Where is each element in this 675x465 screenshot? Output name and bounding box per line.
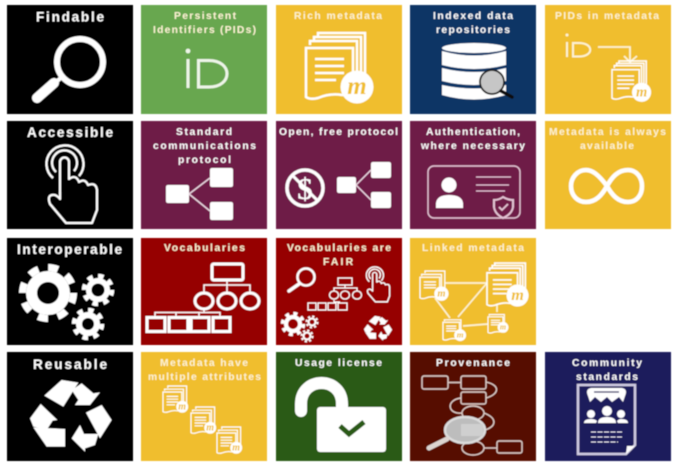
heading: Metadata is always available: Metadata is always: [549, 127, 666, 138]
heading: Authentication, where necessary: [420, 127, 525, 152]
icon: document A: m: [437, 289, 446, 300]
heading: Indexed data repositories: [433, 11, 513, 36]
icon: gears: [22, 268, 112, 338]
icon: small hierarchy: [308, 278, 362, 310]
heading: Vocabularies are FAIR: FAIR: [323, 257, 354, 268]
icon: no dollar sign: $: [297, 171, 313, 206]
panel: Findable: [7, 5, 133, 114]
icon: small touch hand: [366, 267, 390, 302]
panel: Rich metadata: [276, 5, 402, 114]
icon: metadata document stack: m: [347, 73, 367, 100]
heading: Community standards: [572, 358, 642, 383]
panel: Indexed data repositories: [410, 5, 536, 114]
heading: Standard communications protocol: protocol: [178, 155, 231, 166]
heading: Reusable: Reusable: [33, 357, 107, 372]
arrow: iD into document: [598, 47, 637, 62]
panel: Metadata is always available: [545, 121, 671, 229]
icon: document D: m: [500, 323, 506, 332]
heading: Accessible: Accessible: [27, 125, 113, 140]
heading: Metadata is always available: [549, 127, 666, 152]
panel: Community standards: [545, 352, 671, 461]
icon: document C: m: [457, 330, 464, 340]
heading: Persistent Identifiers (PIDs): Identifiers (PIDs): [153, 25, 256, 36]
icon: database with magnifier: [442, 43, 512, 100]
heading: Standard communications protocol: [153, 127, 256, 166]
icon: provenance flow diagram: [422, 376, 522, 455]
panel: Interoperable: [7, 238, 133, 345]
panel: Standard communications protocol: [141, 121, 267, 229]
icon: document two: m: [206, 423, 214, 434]
icon: standards document: [578, 385, 635, 454]
icon: network diagram: [166, 168, 233, 220]
heading: Linked metadata: Linked metadata: [422, 243, 524, 254]
connector lines: [435, 283, 497, 326]
heading: Usage license: Usage license: [295, 358, 382, 369]
heading: Vocabularies are FAIR: Vocabularies are: [287, 243, 391, 254]
heading: Metadata have multiple attributes: multiple attributes: [148, 372, 261, 383]
heading: Standard communications protocol: communications: [153, 141, 256, 152]
panel: Provenance: [410, 352, 536, 461]
heading: Community standards: standards: [576, 372, 638, 383]
heading: Authentication, where necessary: where necessary: [420, 141, 525, 152]
panel: Vocabularies: [141, 238, 267, 345]
heading: Metadata have multiple attributes: Metadata have: [160, 358, 248, 369]
icon: small recycling symbol: [364, 316, 392, 341]
icon: small gears: [282, 314, 318, 342]
panel: Persistent Identifiers: [141, 5, 267, 114]
heading: Findable: Findable: [36, 10, 104, 24]
icon: hierarchy diagram: [147, 264, 259, 332]
panel: Authentication, where necessary: [410, 121, 536, 229]
heading: Provenance: Provenance: [436, 358, 510, 369]
icon: touch hand: [46, 145, 97, 223]
icon: document three: m: [232, 443, 240, 454]
heading: Indexed data repositories: Indexed data: [433, 11, 513, 22]
icon: ID card: [428, 166, 520, 218]
panel: Metadata have multiple attributes: [141, 352, 267, 461]
heading: Community standards: Community: [572, 358, 642, 369]
heading: Open, free protocol: Open, free protocol: [279, 127, 398, 138]
heading: Vocabularies are FAIR: [287, 243, 391, 268]
panel: Linked metadata: [410, 238, 536, 345]
heading: Rich metadata: Rich metadata: [294, 11, 382, 22]
icon: document one: m: [178, 402, 186, 413]
icon: open padlock with check: [301, 383, 386, 452]
panel: Accessible: [7, 121, 133, 229]
icon: metadata document: m: [636, 84, 647, 100]
heading: Vocabularies: Vocabularies: [164, 243, 245, 254]
heading: Metadata have multiple attributes: [148, 358, 261, 383]
panel: Open, free protocol: [276, 121, 402, 229]
heading: Authentication, where necessary: Authentication,: [426, 127, 520, 138]
heading: Persistent Identifiers (PIDs): Persistent: [174, 11, 237, 22]
icon: iD logo: [186, 49, 227, 88]
icon: magnifying glass: [37, 39, 103, 98]
icon: network diagram: [337, 162, 391, 208]
heading: Standard communications protocol: Standard: [176, 127, 232, 138]
icon: magnifier over diagram: [429, 417, 485, 448]
icon: iD logo: [566, 34, 590, 57]
icon: recycling symbol: [30, 380, 112, 452]
heading: Persistent Identifiers (PIDs): [153, 11, 256, 36]
icon: document B: m: [511, 286, 524, 304]
heading: Indexed data repositories: repositories: [436, 25, 510, 36]
panel: Usage license: [276, 352, 402, 461]
heading: PIDs in metadata: PIDs in metadata: [555, 11, 659, 22]
heading: Metadata is always available: available: [580, 141, 634, 152]
panel: PIDs in metadata: [545, 5, 671, 114]
panel: Reusable: [7, 352, 133, 461]
icon: small magnifier: [289, 268, 314, 291]
heading: Interoperable: Interoperable: [17, 242, 122, 257]
panel: Vocabularies are FAIR: [276, 238, 402, 345]
icon: infinity loop: [571, 170, 642, 202]
